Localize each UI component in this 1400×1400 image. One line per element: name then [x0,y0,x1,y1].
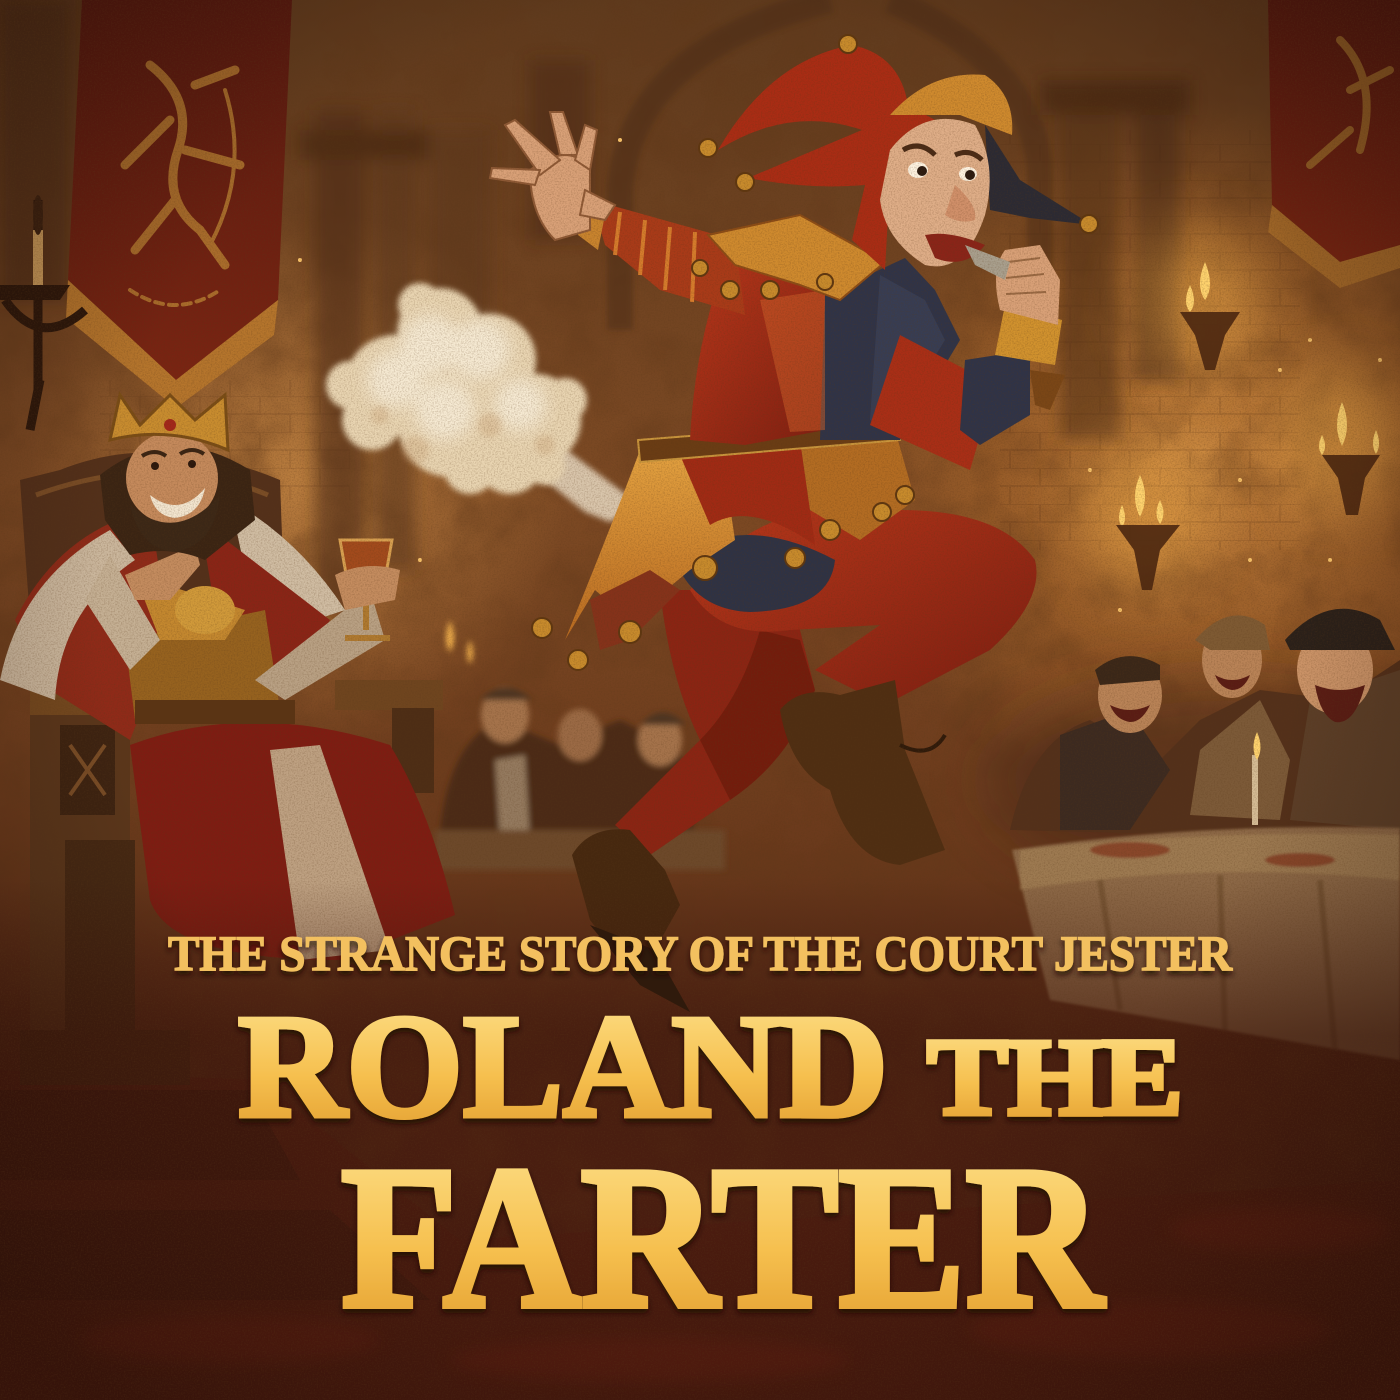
distant crowd behind the jester [435,620,725,870]
crowd shade [990,680,1400,880]
left banner [66,0,292,408]
subtitle: THE STRANGE STORY OF THE COURT JESTER [168,925,1233,981]
floor stains [80,1208,1390,1382]
steps [0,1090,430,1300]
floor [0,1070,1400,1400]
red robe [130,722,455,960]
laughing courtiers [1010,609,1400,840]
bells [532,35,1098,670]
face [880,119,990,266]
left arm [578,195,745,315]
hair and beard [100,446,255,560]
title: Farter: FARTER [341,1125,1105,1351]
goblet with hand [335,540,400,638]
left candelabra [0,195,85,430]
king on throne [0,395,455,1085]
torso [690,255,960,445]
front boot [780,680,945,865]
fart cloud [326,283,640,522]
collar [708,215,885,300]
right arm [870,245,1065,470]
jester hat [718,45,1092,270]
open hand [490,112,615,240]
king hand pointing [125,545,200,600]
belt [638,420,900,462]
tunic [125,610,280,720]
jester trailing boot over shade [590,925,690,1012]
right banner [1268,0,1400,288]
lion emblem [125,65,240,305]
arch [620,0,1040,330]
sparks [298,138,1382,612]
court jester [490,35,1098,1012]
wall candle sconces [1085,230,1400,590]
crown [110,395,228,450]
title: Roland the: THE [927,1016,1183,1138]
banquet table [1012,827,1400,1060]
front leg raised [690,507,1037,705]
right lion emblem [1310,40,1390,165]
back leg and boot [572,590,815,1012]
king face [126,432,218,524]
title: Roland the: ROLAND [238,985,888,1149]
ermine cape [15,510,170,740]
navy breeches [675,535,835,612]
stone columns [0,0,1190,610]
throne [20,452,443,1085]
title: Roland the [238,985,1183,1149]
jester skirt [565,420,915,650]
whistle and fingers [965,245,1010,280]
